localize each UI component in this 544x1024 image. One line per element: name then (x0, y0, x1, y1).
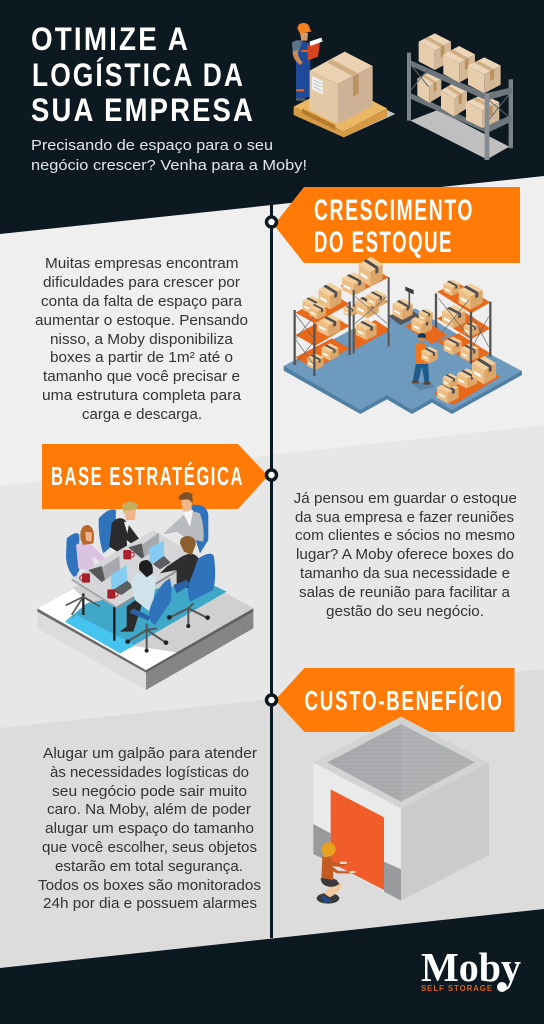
timeline vertical line (270, 205, 273, 938)
label: custo-benefício (275, 668, 514, 732)
timeline node 3 (266, 695, 276, 705)
text block: crescimento: aumentar o estoque. Pensando (35, 313, 248, 329)
subtitle: Precisando de espaço para o seu (31, 138, 273, 154)
label: base estratégica: BASE ESTRATÉGICA (51, 461, 244, 491)
text block: base estratégica: tamanho da sua necessidade e (300, 566, 510, 582)
text block: crescimento (35, 256, 248, 423)
panel: custo-benefício band (0, 669, 544, 968)
text block: base estratégica: gestão do seu negócio. (326, 604, 484, 620)
text block: base estratégica: salas de reunião para facilitar a (299, 585, 511, 601)
text block: custo-benefício: que você escolher, seus objetos (42, 840, 257, 856)
title: LOGÍSTICA DA (32, 57, 245, 93)
text block: base estratégica (294, 491, 517, 620)
text block: base estratégica: lugar? A Moby oferece boxes do (296, 547, 514, 563)
timeline node 1 (266, 217, 276, 227)
text block: crescimento: boxes a partir de 1m² até o (50, 350, 233, 366)
title: OTIMIZE A (31, 21, 190, 57)
text block: custo-benefício: Alugar um galpão para atender (43, 746, 257, 762)
icon: worker with box on pallet (292, 23, 395, 137)
sub: mugs (80, 550, 134, 599)
text block: crescimento: nisso, a Moby disponibiliza (50, 332, 234, 348)
text block: crescimento: conta da falta de espaço para (41, 294, 243, 310)
text block: custo-benefício: alugar um espaço do tamanho (45, 821, 254, 837)
text block: base estratégica: da sua empresa e fazer reuniões (295, 510, 514, 526)
text block: custo-benefício: seu negócio pode sair muito (52, 784, 247, 800)
sub: people behind table (76, 492, 204, 572)
sub: front person and chair (120, 560, 172, 653)
text block: base estratégica: com clientes e sócios no mesmo (295, 528, 515, 544)
panel: base estratégica band (0, 425, 544, 730)
sub: chairs behind table (66, 505, 208, 578)
title: SUA EMPRESA (31, 92, 255, 128)
illustration: warehouse floor with shelves (284, 257, 522, 414)
text block: custo-benefício (38, 746, 261, 912)
subtitle (31, 138, 307, 174)
title (31, 21, 255, 128)
logo: Moby Self Storage: SELF STORAGE (421, 983, 493, 993)
timeline node 2 (266, 470, 276, 480)
text block: crescimento: carga e descarga. (82, 407, 202, 423)
illustration: meeting on platform (37, 492, 253, 690)
sub: table (72, 530, 198, 607)
sub: front right person and chair (160, 536, 215, 628)
subtitle: negócio crescer? Venha para a Moby! (31, 158, 307, 174)
text block: crescimento: dificuldades para crescer por (43, 275, 240, 291)
text block: crescimento: uma estrutura completa para (42, 388, 242, 404)
label: crescimento do estoque (274, 187, 520, 263)
panel: crescimento do estoque band (0, 176, 544, 490)
text block: custo-benefício: Todos os boxes são monitorados (38, 878, 261, 894)
label: base estratégica (42, 444, 268, 509)
icon: storage shelf with boxes (407, 33, 513, 160)
text block: base estratégica: Já pensou em guardar o estoque (294, 491, 517, 507)
text block: crescimento: tamanho que você precisar e (43, 369, 240, 385)
text block: custo-benefício: estarão em total segurança. (55, 859, 243, 875)
label: crescimento do estoque: DO ESTOQUE (314, 226, 453, 259)
logo: Moby Self Storage: Moby (421, 944, 521, 990)
text block: custo-benefício: caro. Na Moby, além de poder (47, 802, 251, 818)
text block: custo-benefício: 24h por dia e possuem alarmes (43, 896, 257, 912)
sub: laptops (88, 533, 171, 595)
text block: crescimento: Muitas empresas encontram (45, 256, 238, 272)
sub: person pushing door (317, 842, 355, 904)
illustration: storage box with orange door and person (313, 717, 489, 904)
text block: custo-benefício: às necessidades logísticas do (50, 765, 249, 781)
